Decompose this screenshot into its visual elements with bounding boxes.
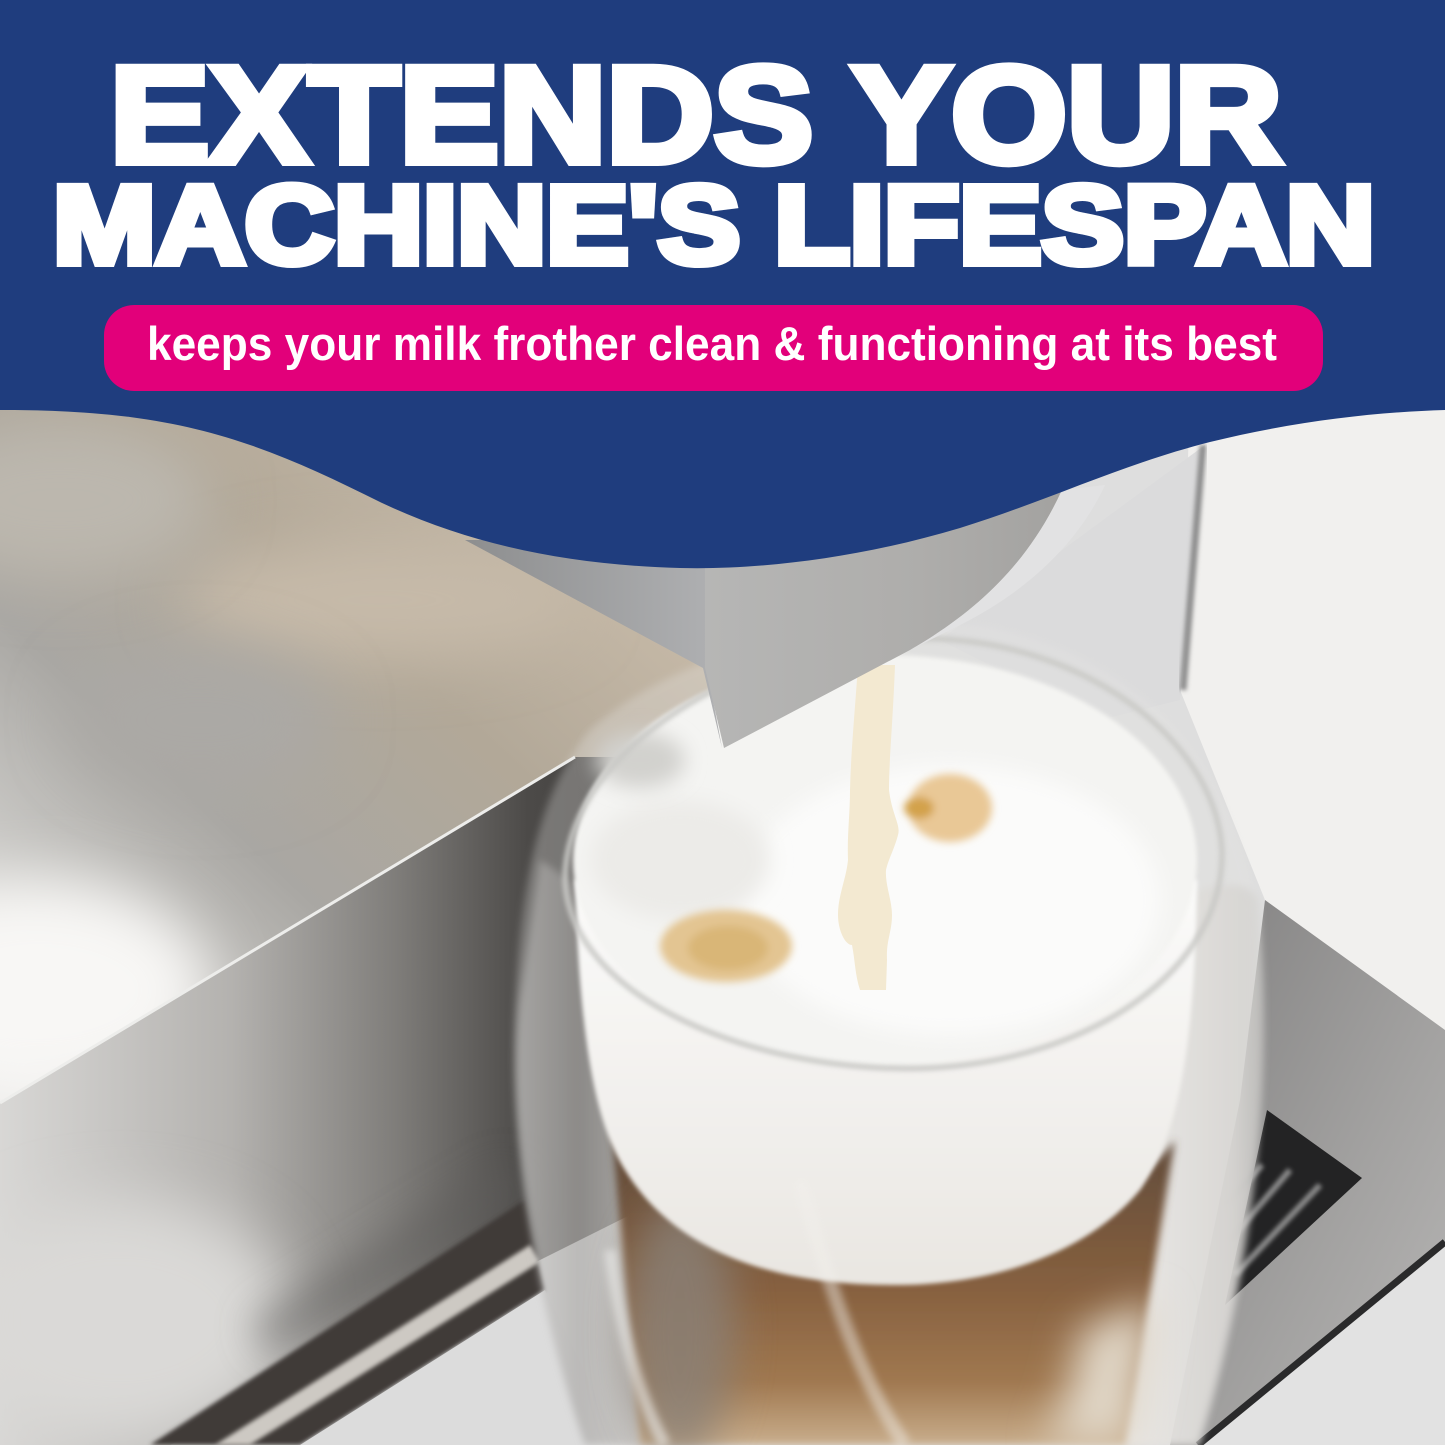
glass rim: [565, 639, 1222, 1068]
steel machine upper panel: [0, 400, 720, 1110]
milk frother spout: [465, 485, 1105, 748]
machine base strip: [150, 1200, 620, 1445]
blue wave header background: [0, 0, 1445, 568]
title: [53, 39, 1375, 287]
subtitle pill: keeps your milk frother clean & functioning at its best: [147, 317, 1277, 370]
glass body: [514, 622, 1263, 1445]
coffee layer: [612, 1130, 1175, 1445]
glass right wall: [1110, 885, 1263, 1445]
coffee spots in foam: [660, 774, 992, 982]
subtitle pill: [104, 305, 1323, 391]
steel machine lower panel: [0, 750, 660, 1445]
glass lower reflections: [800, 1180, 905, 1445]
title: MACHINE'S LIFESPAN: [53, 164, 1375, 287]
machine back panel: [940, 445, 1205, 720]
drip tray: [1170, 900, 1445, 1445]
title: EXTENDS YOUR: [110, 39, 1282, 192]
white wall at right: [1180, 400, 1445, 1035]
foam side: [575, 880, 1197, 1285]
foam top: [573, 655, 1197, 1065]
glass left wall: [516, 860, 640, 1445]
milk stream: [838, 665, 899, 990]
photo: coffee machine pouring milk into a glass: [0, 400, 1445, 1445]
